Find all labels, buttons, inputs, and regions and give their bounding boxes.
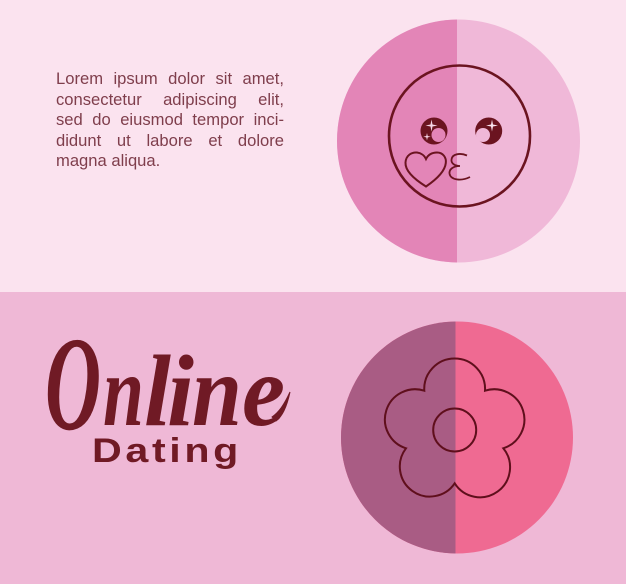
title: Online: i — [167, 334, 194, 448]
title: Online: O — [45, 309, 101, 458]
panel: top background — [0, 0, 626, 292]
subtitle: Dating: Dating — [92, 432, 242, 470]
text block: lorem ipsum paragraph: magna aliqua. — [56, 151, 160, 170]
top circle background — [337, 20, 580, 262]
icon: flower badge — [341, 322, 573, 554]
text block: lorem ipsum paragraph — [56, 69, 284, 170]
title: Online: e — [242, 334, 285, 448]
title: Online: n — [192, 334, 242, 447]
title: Online — [45, 309, 290, 458]
bottom circle background — [341, 322, 573, 554]
icon: kissing face badge — [337, 20, 580, 262]
title flourish — [272, 392, 290, 421]
face outline — [389, 66, 530, 206]
text block: lorem ipsum paragraph: sed do eiusmod tempor inci- — [56, 110, 284, 129]
heart cheek — [405, 152, 446, 186]
title: Online: n — [103, 335, 144, 448]
text block: lorem ipsum paragraph: didunt ut labore et dolore — [56, 131, 284, 150]
left eye — [420, 118, 448, 144]
title: Online: l — [144, 334, 171, 448]
panel: bottom background — [0, 292, 626, 584]
flower petals — [385, 359, 524, 497]
text block: lorem ipsum paragraph: consectetur adipiscing elit, — [56, 90, 284, 109]
text block: lorem ipsum paragraph: Lorem ipsum dolor sit amet, — [56, 69, 284, 88]
right eye — [475, 118, 502, 144]
flower centre — [433, 408, 476, 452]
kissing mouth — [449, 154, 470, 180]
